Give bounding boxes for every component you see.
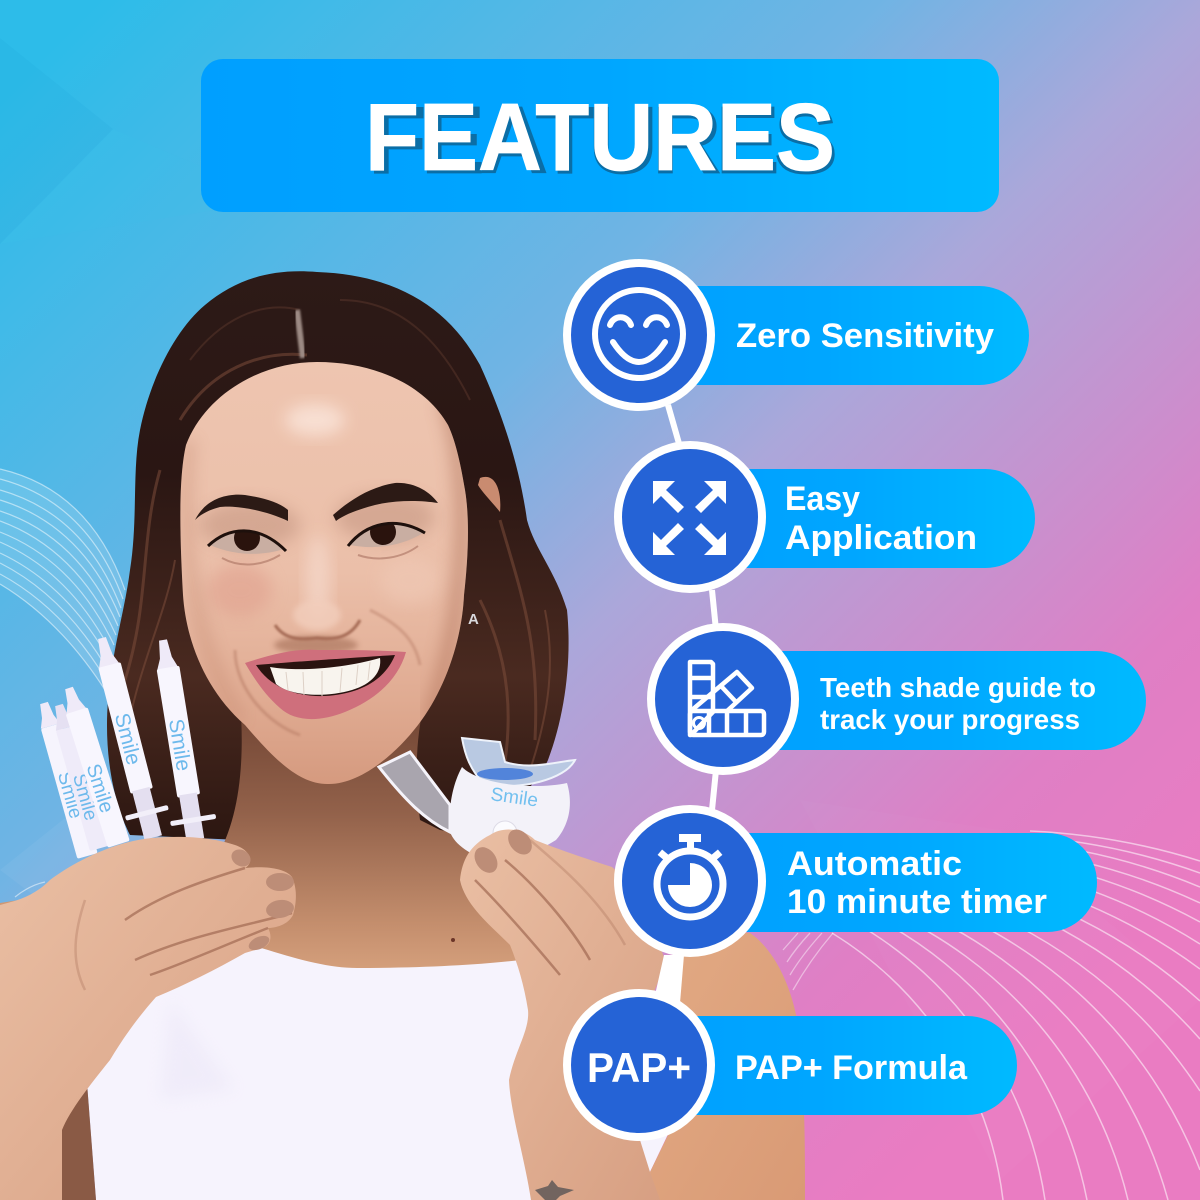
right shoulder [650, 932, 805, 1200]
nose [274, 600, 360, 654]
left hand and arm [0, 837, 296, 1200]
label: Teeth shade guide to [820, 672, 1096, 703]
neck and chest [150, 700, 560, 980]
decorative arcs: bottom right [832, 831, 1200, 1200]
dress [87, 930, 670, 1200]
feature 3: teeth shade guide [651, 627, 1146, 771]
left shoulder [0, 895, 50, 1010]
blue LED [477, 768, 533, 780]
torso side [62, 1083, 96, 1200]
pill [620, 1016, 1017, 1115]
icon circle [567, 263, 711, 407]
teeth [270, 658, 380, 695]
icon circle [567, 993, 711, 1137]
label: PAP+ Formula [735, 1049, 968, 1087]
icon circle [618, 445, 762, 589]
product: LED whitening device [379, 738, 575, 863]
feature 1: zero sensitivity [567, 263, 1029, 407]
knuckle and finger creases [76, 868, 292, 990]
syringe [81, 633, 175, 843]
product: gel syringes [33, 633, 219, 859]
label: Easy [785, 480, 860, 518]
wrist tattoo [535, 1180, 574, 1200]
label: Zero Sensitivity [736, 317, 994, 355]
syringe [48, 702, 110, 851]
icon: shade swatch [690, 662, 764, 735]
syringe [141, 636, 219, 843]
mole [451, 938, 455, 942]
icon: expand arrows [653, 481, 726, 555]
syringe: Smile [110, 711, 145, 767]
product: LED whitening device: Smile [489, 784, 539, 812]
icon: stopwatch [657, 834, 723, 917]
face [180, 362, 468, 784]
label: track your progress [820, 704, 1080, 735]
ear [478, 477, 500, 512]
icon circle [618, 809, 762, 953]
feature 5: PAP+ formula [567, 993, 1017, 1137]
feature 4: automatic timer [618, 809, 1097, 953]
label: Application [785, 519, 977, 557]
pill [670, 469, 1035, 568]
pill [670, 833, 1097, 932]
icon: PAP+ text: PAP+ [587, 1044, 691, 1091]
hair parting [297, 310, 303, 358]
icon circle [651, 627, 795, 771]
syringe [33, 700, 98, 859]
power button [493, 821, 517, 845]
left eye [208, 525, 286, 564]
hair strands [122, 300, 550, 790]
earring: A [468, 611, 479, 628]
syringe: Smile [53, 770, 86, 821]
nails [470, 825, 537, 877]
pill [620, 286, 1029, 385]
connectors between feature icons [655, 405, 716, 1003]
smile [245, 650, 406, 719]
decorative arcs: left [0, 469, 125, 897]
finger creases [475, 840, 625, 975]
device body [450, 767, 570, 863]
syringe: Smile [82, 761, 118, 816]
right hand and forearm [460, 825, 665, 1200]
label: 10 minute timer [787, 883, 1047, 921]
mouth tray handle [379, 752, 450, 832]
icon: smiley [595, 290, 683, 378]
eyebrows [195, 483, 438, 521]
face shading [186, 400, 462, 735]
title banner: FEATURES [368, 87, 838, 194]
right eye [348, 519, 425, 558]
label: Automatic [787, 845, 962, 883]
title banner: FEATURES [365, 84, 835, 191]
mouth tray [462, 738, 575, 786]
nails [228, 846, 295, 953]
syringe [58, 684, 130, 848]
pill [703, 651, 1146, 750]
syringe: Smile [164, 717, 195, 773]
feature 2: easy application [618, 445, 1035, 589]
hair [107, 271, 569, 850]
woman holding product [0, 271, 805, 1200]
syringe: Smile [68, 772, 101, 823]
title banner [201, 59, 999, 212]
dress fold shading [160, 1000, 235, 1100]
